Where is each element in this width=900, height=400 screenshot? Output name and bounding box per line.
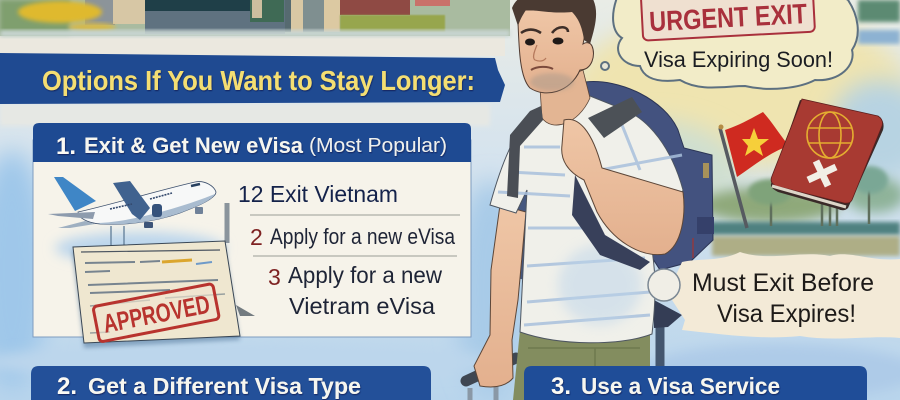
- thought bubble: urgent exit: [601, 0, 858, 89]
- icon: airplane: [48, 177, 225, 264]
- panel 3: use a visa service: 3.: [551, 373, 571, 400]
- panel 2: different visa type: Get a Different Visa Type: [88, 373, 361, 399]
- step 2: 2: [250, 224, 263, 250]
- step 3: 3: [268, 264, 281, 290]
- decorative post: [224, 203, 230, 243]
- X mark: [808, 161, 836, 186]
- top scene: border gate building and flowers: [0, 0, 510, 37]
- step 2: Apply for a new eVisa: [270, 224, 456, 249]
- panel 2: different visa type: [31, 366, 431, 400]
- bubble text: Visa Expiring Soon!: [644, 47, 833, 72]
- person: worried traveller with backpack: [466, 0, 714, 400]
- backpack straps: [588, 97, 642, 138]
- icon: Vietnam flag: [718, 112, 789, 228]
- hair: [512, 0, 596, 44]
- panel 1 heading: 1.: [56, 133, 76, 160]
- panel 2: different visa type: 2.: [57, 373, 77, 400]
- banner: section heading: [0, 53, 505, 104]
- right landscape strip: [700, 0, 900, 256]
- approved stamp: APPROVED: [100, 289, 212, 339]
- neck: [540, 70, 590, 125]
- icon: red passport with X: [771, 99, 884, 210]
- step 3: Vietram eVisa: [289, 293, 435, 319]
- torn paper callout: must exit before visa expires: [648, 252, 900, 339]
- panel 1: exit and get new eVisa: [33, 123, 471, 348]
- approved document: [72, 241, 240, 348]
- shirt stripes: [498, 120, 682, 325]
- luggage handle: [466, 358, 516, 400]
- t-shirt: [490, 94, 683, 343]
- panel 3: use a visa service: Use a Visa Service: [581, 373, 780, 399]
- heading text: Options If You Want to Stay Longer:: [42, 65, 475, 96]
- left arm: [474, 205, 526, 387]
- trousers: [513, 330, 650, 400]
- backpack: [585, 82, 713, 270]
- torn paper callout: must exit before visa expires: Must Exit Before: [692, 269, 874, 297]
- torn paper callout: must exit before visa expires: Visa Expires!: [717, 300, 856, 328]
- step 3: [268, 262, 442, 319]
- forearm and hand: [562, 119, 684, 255]
- panel 1: exit and get new eVisa: (Most Popular): [309, 135, 447, 157]
- telescoping handle post: [656, 325, 664, 366]
- globe emblem: [807, 112, 853, 158]
- step 1: 12 Exit Vietnam: [238, 181, 398, 207]
- panel 1: exit and get new eVisa: Exit & Get New eVisa: [84, 133, 304, 158]
- face features: [521, 27, 568, 70]
- head: [518, 10, 594, 93]
- step 3: Apply for a new: [288, 262, 442, 288]
- panel 3: use a visa service: [524, 366, 867, 400]
